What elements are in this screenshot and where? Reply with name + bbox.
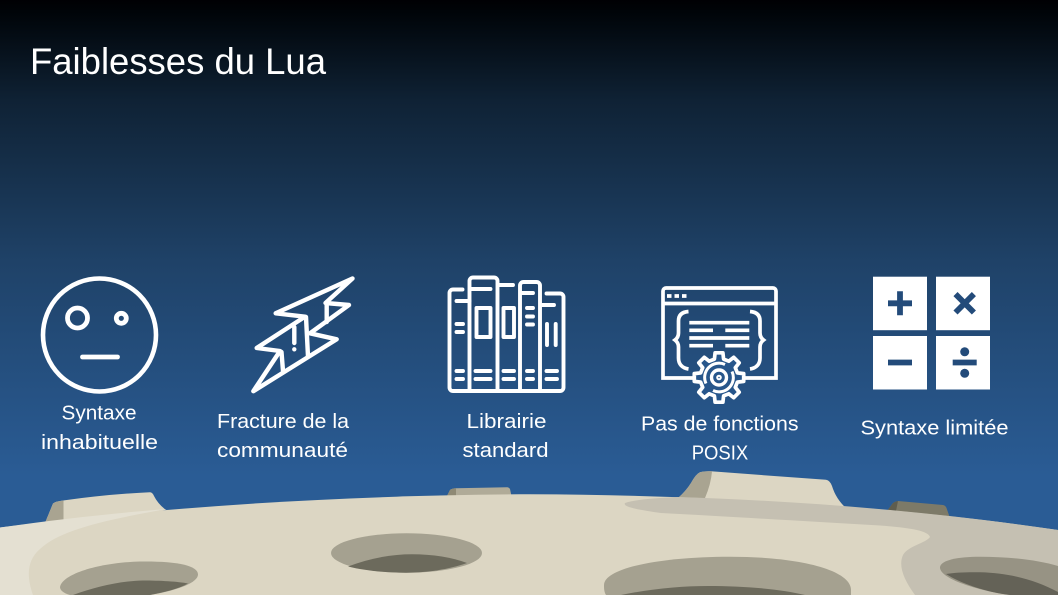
label: Librairie standard (462, 410, 548, 462)
label: Pas de fonctions POSIX: Pas de fonctions (641, 412, 798, 436)
crater: centre (331, 533, 482, 573)
rock: far left (45, 492, 166, 525)
title: Faiblesses du Lua (30, 41, 326, 82)
label: Fracture de la communauté (217, 410, 350, 462)
rock: large right (678, 471, 846, 508)
label: Librairie standard: standard (462, 439, 548, 462)
label: Syntaxe limitée: Syntaxe limitée (860, 416, 1008, 440)
crater: large (604, 557, 851, 595)
label: Fracture de la communauté: Fracture de la (217, 410, 350, 433)
label: Librairie standard: Librairie (466, 410, 546, 433)
label: Syntaxe inhabituelle: Syntaxe (62, 402, 136, 424)
label: Pas de fonctions POSIX (641, 412, 798, 464)
icon: arithmetic operators (873, 277, 990, 390)
crater: right (940, 557, 1058, 595)
label: Pas de fonctions POSIX: POSIX (692, 442, 748, 464)
rock: dark right (887, 501, 950, 518)
icon: code window with gear (663, 288, 776, 402)
lighter ground on the left (0, 509, 167, 595)
rock: small centre (447, 487, 512, 496)
icon: broken lightning bolt (253, 278, 352, 391)
illustration: moon surface with rocks and craters (0, 471, 1058, 595)
label: Syntaxe inhabituelle (41, 402, 158, 454)
icon: neutral face (43, 278, 156, 392)
label: Fracture de la communauté: communauté (217, 439, 348, 462)
moon ground (0, 494, 1058, 595)
icon: books on a shelf (450, 278, 564, 391)
crater: left (60, 561, 198, 595)
shaded ground on the right (625, 497, 1058, 595)
label: Syntaxe inhabituelle: inhabituelle (41, 431, 158, 454)
